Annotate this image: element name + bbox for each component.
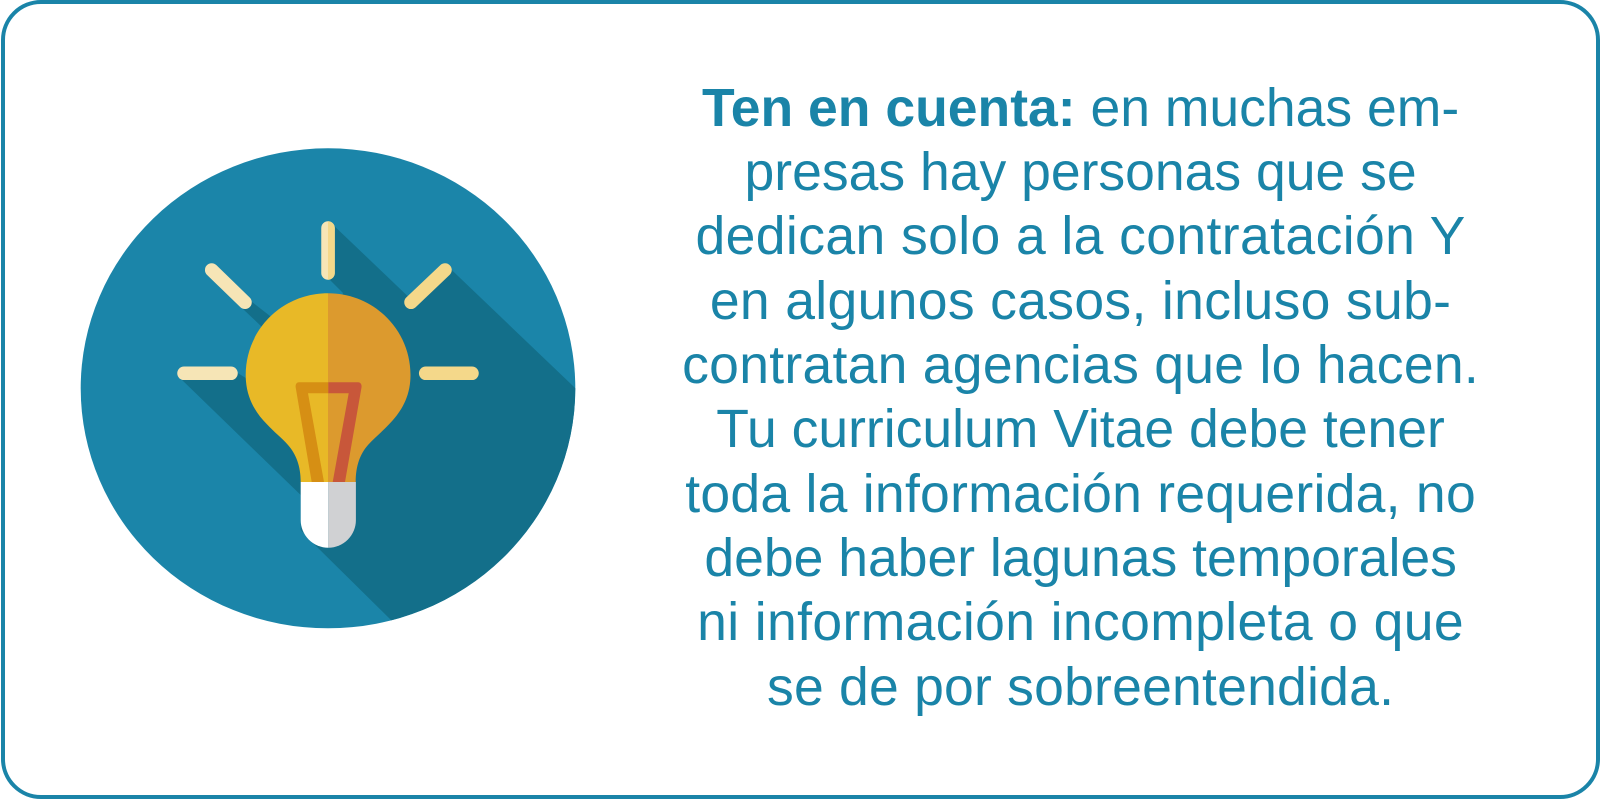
icon: long shadow [182,227,576,620]
text block: advice: presas hay personas que se [745,143,1417,202]
icon: bulb base [301,482,356,548]
text block: advice: ni información incompleta o que [697,593,1464,652]
icon: bulb glass [246,293,410,482]
text block: advice: se de por sobreentendida. [767,658,1394,717]
text block: advice: debe haber lagunas temporales [704,529,1457,588]
text block: advice: dedican solo a la contratación Y [695,207,1466,266]
icon: filament [296,382,362,482]
text block: advice: Ten en cuenta: en muchas em- [702,79,1459,138]
text block: advice: contratan agencias que lo hacen. [682,336,1479,395]
icon: teal circle [81,148,575,628]
text block: advice: toda la información requerida, no [685,465,1476,524]
icon: rays [184,221,472,373]
text block: advice: Tu curriculum Vitae debe tener [716,400,1445,459]
icon: light bulb in circle [80,148,576,628]
text block: advice: en algunos casos, incluso sub- [710,272,1451,331]
text block: advice [682,79,1479,717]
